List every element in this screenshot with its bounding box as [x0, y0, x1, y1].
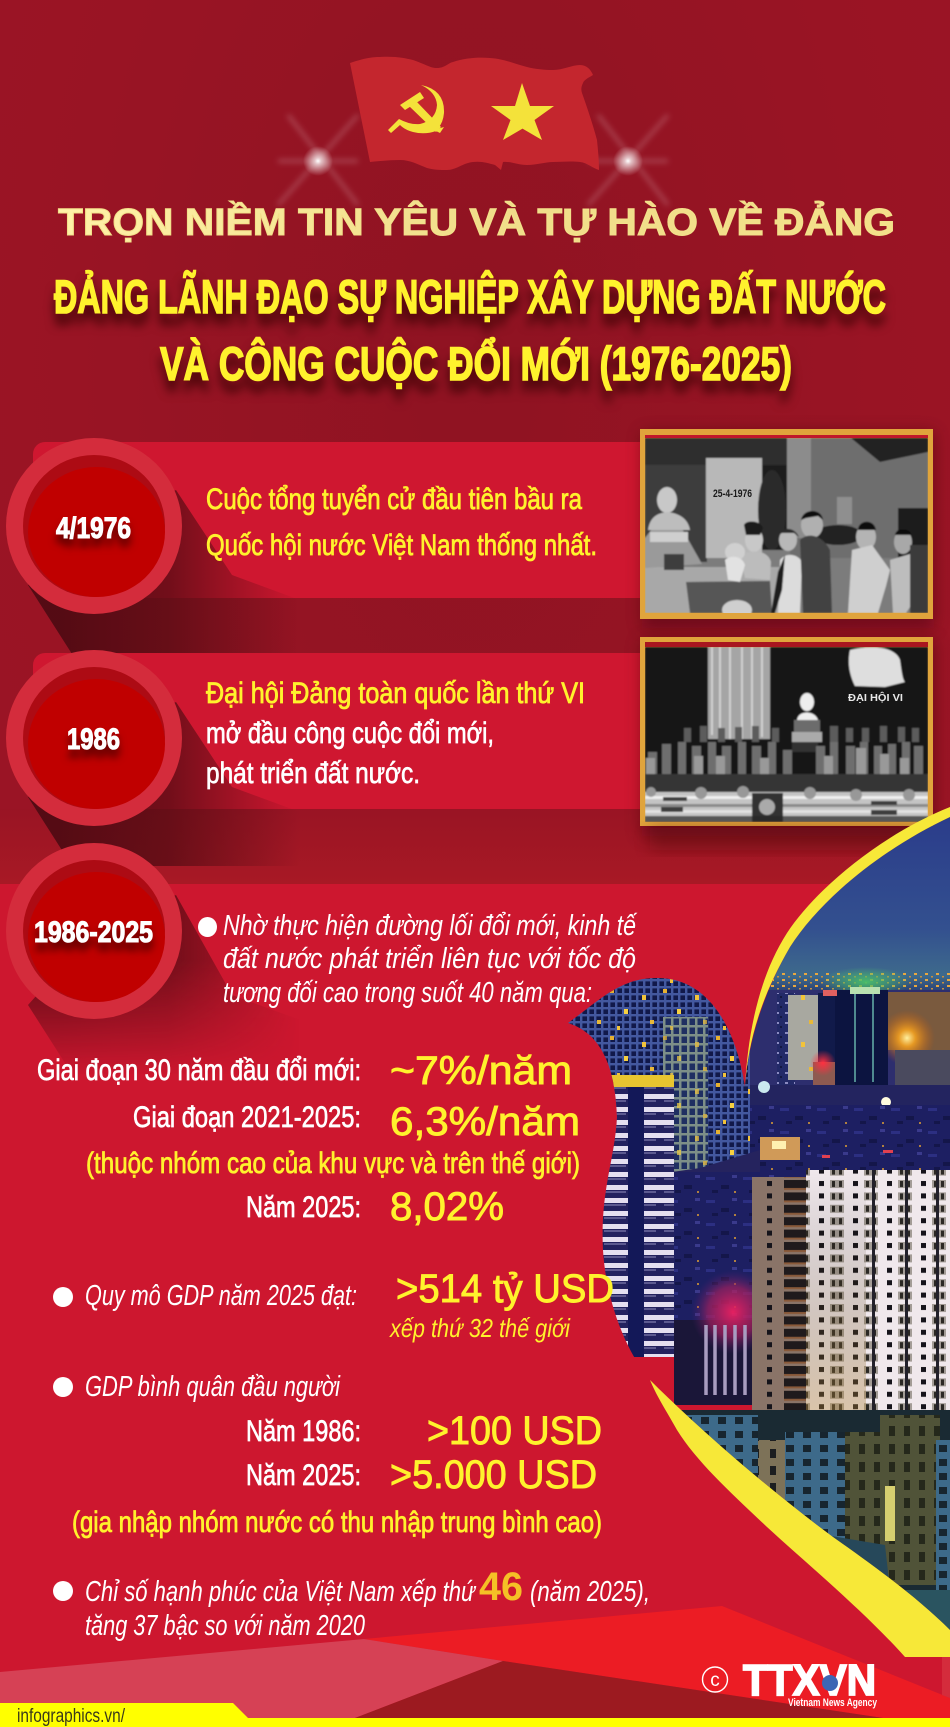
- stats: growth: Năm 2025:: [246, 1191, 361, 1224]
- stats: growth: 8,02%: [390, 1185, 504, 1229]
- stats: GDP per capita: [53, 1371, 602, 1539]
- text: intro bullet: Nhờ thực hiện đường lối đổi mới, kinh tế: [223, 910, 637, 942]
- stats: GDP: xếp thứ 32 thế giới: [388, 1313, 571, 1343]
- icon: star: [491, 83, 554, 140]
- image: night city in dove shape: [560, 805, 950, 1635]
- swoosh: top yellow: [745, 807, 950, 1087]
- panel: 4/1976: [6, 438, 663, 654]
- logo: TTXVN: c: [710, 1670, 720, 1691]
- description: [206, 483, 597, 562]
- flag: [350, 57, 599, 170]
- polygon: dark red: [355, 1661, 883, 1718]
- swoosh: bottom yellow: [650, 1380, 950, 1657]
- stats: GDP per capita: Năm 1986:: [246, 1415, 361, 1448]
- logo: TTXVN: Vietnam News Agency: [788, 1697, 878, 1709]
- sparkles: [278, 115, 668, 205]
- red panel: [0, 884, 950, 1719]
- logo: TTXVN: TTXVN: [743, 1656, 876, 1705]
- panel: 1986: [6, 650, 663, 866]
- title line: TRỌN NIỀM TIN YÊU VÀ TỰ HÀO VỀ ĐẢNG: [58, 200, 895, 244]
- photo: party congress 1986: [640, 637, 934, 836]
- date: 1986-2025: [34, 916, 153, 949]
- polygon: bright red: [364, 1606, 950, 1718]
- stats: happiness: Chỉ số hạnh phúc của Việt Nam xếp thứ: [85, 1576, 477, 1608]
- stats: GDP per capita: Năm 2025:: [246, 1459, 361, 1492]
- stats: growth: Giai đoạn 30 năm đầu đổi mới:: [37, 1054, 361, 1087]
- stats: GDP: [53, 1267, 614, 1343]
- description: Đại hội Đảng toàn quốc lần thứ VI: [206, 677, 585, 710]
- stats: GDP per capita: (gia nhập nhóm nước có thu nhập trung bình cao): [72, 1506, 602, 1539]
- stats: growth: 6,3%/năm: [390, 1100, 580, 1144]
- logo: TTXVN: [702, 1656, 878, 1709]
- polygon: pink: [0, 1639, 503, 1718]
- main heading: [54, 270, 886, 390]
- description: Cuộc tổng tuyển cử đầu tiên bầu ra: [206, 483, 582, 516]
- stats: happiness: (năm 2025),: [530, 1576, 650, 1608]
- stats: growth: ~7%/năm: [390, 1049, 572, 1093]
- stats: happiness: 46: [479, 1565, 523, 1609]
- description: Quốc hội nước Việt Nam thống nhất.: [206, 529, 597, 562]
- stats: GDP: >514 tỷ USD: [396, 1267, 614, 1311]
- stats: happiness: [53, 1565, 650, 1642]
- stats: happiness: tăng 37 bậc so với năm 2020: [85, 1610, 365, 1642]
- stats: GDP per capita: >5.000 USD: [390, 1453, 597, 1497]
- description: [206, 677, 585, 790]
- photo caption: 25-4-1976: [713, 488, 752, 500]
- description: mở đầu công cuộc đổi mới,: [206, 717, 494, 750]
- corner strip: [942, 1657, 950, 1698]
- stats: growth: Giai đoạn 2021-2025:: [133, 1101, 361, 1134]
- text: intro bullet: [198, 910, 637, 1009]
- stats: growth: [37, 1049, 580, 1229]
- source: infographics.vn/: [17, 1706, 126, 1727]
- stats: GDP per capita: GDP bình quân đầu người: [85, 1371, 341, 1403]
- date: 4/1976: [56, 512, 131, 545]
- date: 1986: [67, 723, 120, 756]
- stats: GDP: Quy mô GDP năm 2025 đạt:: [85, 1280, 357, 1312]
- footer strip: [0, 1703, 950, 1727]
- description: phát triển đất nước.: [206, 757, 420, 790]
- photo caption: ĐẠI HỘI VI: [848, 691, 903, 704]
- stats: growth: (thuộc nhóm cao của khu vực và trên thế giới): [86, 1147, 580, 1180]
- text: intro bullet: đất nước phát triển liên tục với tốc độ: [223, 943, 636, 975]
- photo: election 1976: [640, 429, 934, 628]
- circle: 1986-2025: [6, 843, 300, 1074]
- text: intro bullet: tương đối cao trong suốt 40 năm qua:: [223, 977, 592, 1009]
- icon: hammer and sickle: [388, 85, 444, 133]
- strip between panels: [0, 809, 950, 884]
- stats: GDP per capita: >100 USD: [427, 1409, 602, 1453]
- photo shadow: [650, 828, 950, 850]
